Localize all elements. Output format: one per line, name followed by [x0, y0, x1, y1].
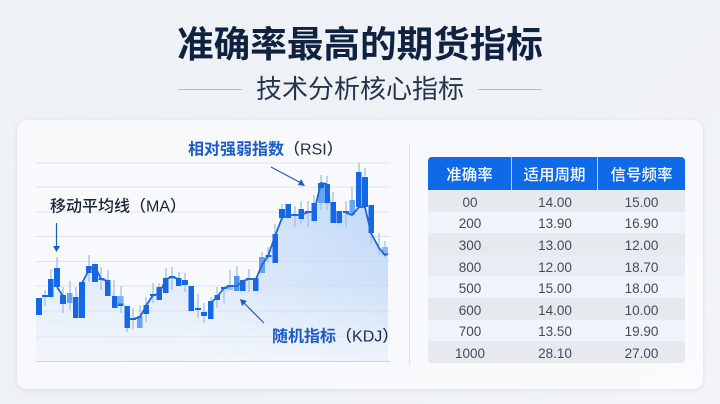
panel: main card	[17, 120, 703, 389]
panel divider	[409, 143, 410, 365]
data table	[428, 157, 685, 363]
data table: 适用周期	[523, 166, 586, 184]
data table: 28.10	[538, 346, 572, 361]
candle wicks	[45, 163, 385, 332]
data table: 10.00	[625, 303, 658, 318]
data table: 12.00	[625, 238, 658, 253]
data table: 500	[459, 281, 481, 296]
arrow: KDJ	[240, 299, 264, 323]
data table: 准确率	[446, 166, 493, 184]
data table: 15.00	[538, 281, 572, 296]
area under line	[36, 183, 388, 362]
data table: 19.90	[625, 324, 658, 339]
candlestick chart	[36, 140, 390, 362]
candle bodies	[36, 172, 388, 328]
data table: 13.50	[538, 324, 572, 339]
data table: 200	[459, 216, 481, 231]
moving average line	[57, 183, 388, 319]
data table: 800	[459, 260, 481, 275]
data table: 12.00	[538, 260, 572, 275]
data table: 13.00	[538, 238, 572, 253]
data table: 600	[459, 303, 481, 318]
label: MA: 移动平均线（MA）	[50, 198, 186, 216]
title: 准确率最高的期货指标	[177, 24, 543, 65]
label: KDJ: 随机指标（KDJ）	[272, 328, 398, 346]
data table: 1000	[455, 346, 485, 361]
data table: 信号频率	[610, 166, 672, 184]
data table: 00	[462, 195, 478, 210]
data table: 18.00	[625, 281, 658, 296]
data table: 13.90	[538, 216, 572, 231]
data table: 300	[459, 238, 481, 253]
data table: 14.00	[538, 303, 572, 318]
data table: 27.00	[625, 346, 658, 361]
label: RSI: 相对强弱指数（RSI）	[188, 140, 343, 158]
subtitle with side rules: 技术分析核心指标	[256, 74, 464, 104]
data table: 15.00	[625, 195, 658, 210]
data table: 16.90	[625, 216, 658, 231]
data table: 700	[459, 324, 481, 339]
arrow: RSI	[271, 167, 305, 186]
data table: 14.00	[538, 195, 572, 210]
data table: 18.70	[625, 260, 658, 275]
arrow: MA	[53, 223, 60, 252]
